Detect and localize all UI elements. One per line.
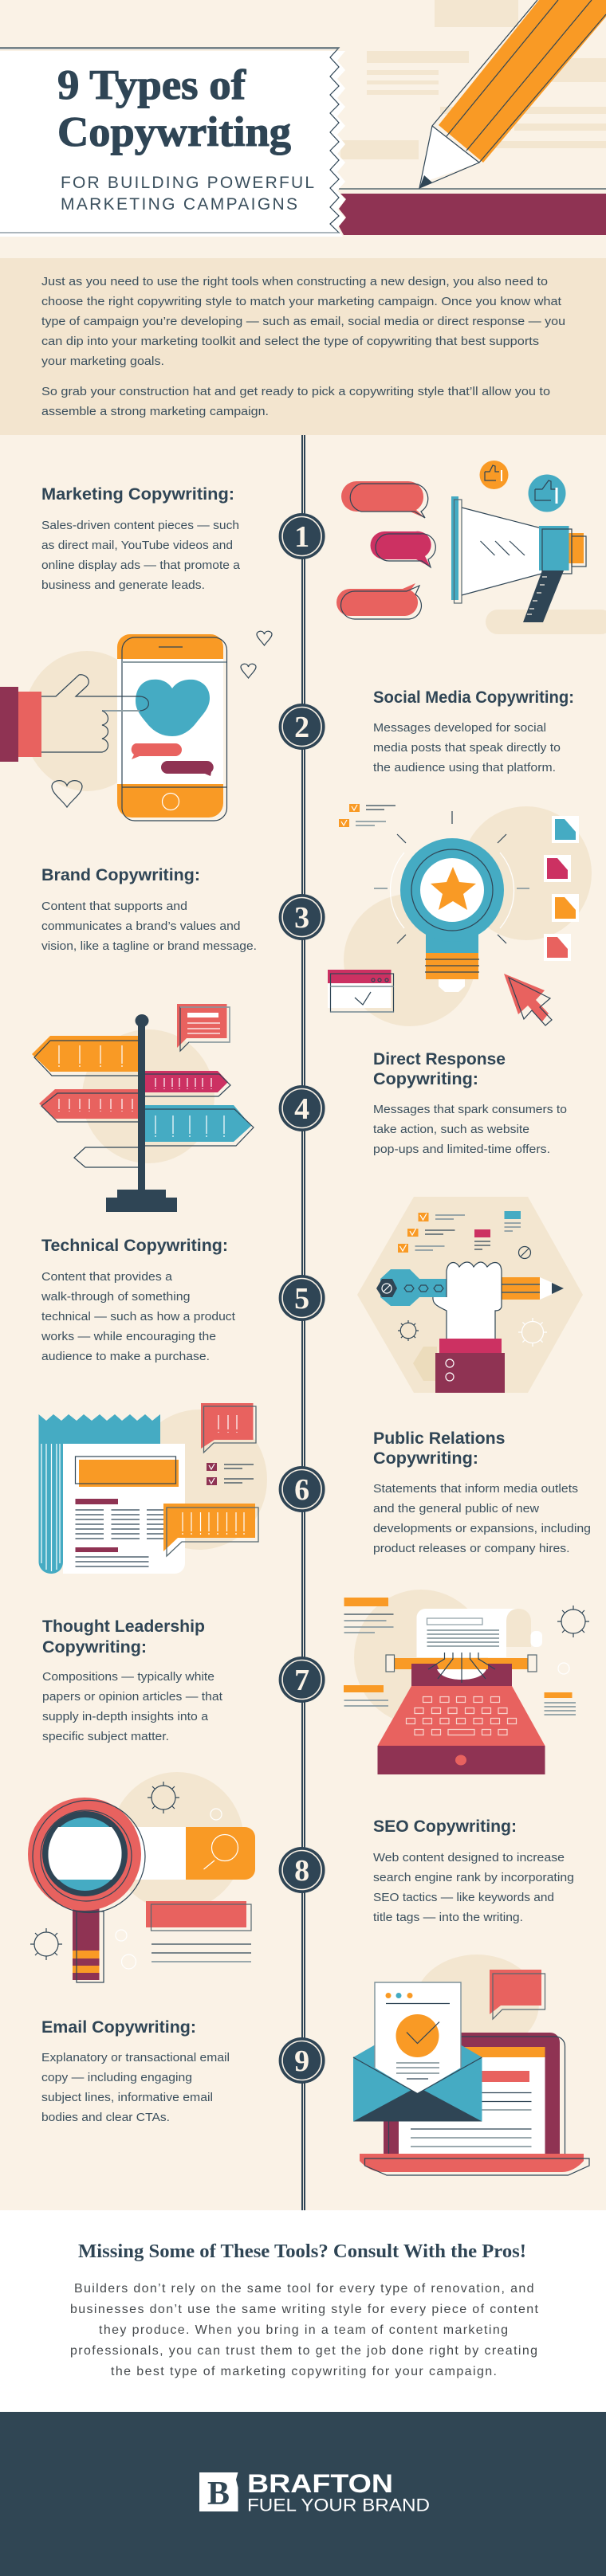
section 2 text: social media copywriting: Messages developed for social — [373, 721, 546, 735]
illustration: thumbs up hand and phone — [0, 631, 272, 821]
section 6 text: public relations copywriting: Statements that inform media outlets — [373, 1482, 578, 1496]
closing text: businesses don’t use the same writing style for every piece of content — [70, 2303, 539, 2316]
wrench — [376, 1269, 449, 1306]
section 5 text: technical copywriting: walk-through of something — [41, 1290, 190, 1304]
intro text — [41, 275, 565, 418]
logo mark: B — [207, 2476, 230, 2512]
section 8 text: seo copywriting: SEO Copywriting: — [373, 1817, 517, 1836]
blank sign — [74, 1147, 138, 1167]
checklist — [339, 804, 395, 827]
keys — [407, 1697, 517, 1735]
section 3 text: brand copywriting — [41, 866, 257, 953]
section 7 text: thought leadership copywriting: supply in-depth insights into a — [42, 1710, 209, 1723]
illustration: newspaper with speech bubbles — [38, 1403, 267, 1574]
badge 9: 9 — [294, 2045, 309, 2078]
logo wordmark: FUEL YOUR BRAND — [247, 2496, 430, 2515]
section 1 text: marketing copywriting: business and generate leads. — [41, 578, 205, 592]
coral speech bubble — [201, 1403, 256, 1453]
logo wordmark — [247, 2469, 430, 2515]
illustration: megaphone with speech bubbles — [336, 461, 606, 634]
intro text: type of campaign you’re developing — such as email, social media or direct response — you — [41, 315, 565, 328]
section 7 text: thought leadership copywriting: Copywriting: — [42, 1638, 147, 1657]
header banner: MARKETING CAMPAIGNS — [61, 195, 297, 214]
section 3 text: brand copywriting: vision, like a tagline or brand message. — [41, 939, 257, 953]
hearts — [52, 631, 272, 807]
gear light — [518, 1318, 547, 1347]
section 3 text: brand copywriting: Content that supports and — [41, 900, 187, 913]
section 8 text: seo copywriting: search engine rank by incorporating — [373, 1871, 574, 1884]
title: 9 Types of — [57, 62, 246, 108]
section 5 text: technical copywriting: Content that provides a — [41, 1270, 173, 1284]
heart — [136, 680, 210, 736]
small circle — [558, 1663, 569, 1674]
closing text — [70, 2282, 539, 2378]
section 4 text: direct response copywriting: take action, such as website — [373, 1123, 529, 1136]
section 4 text: direct response copywriting: pop-ups and limited-time offers. — [373, 1143, 550, 1156]
section 6 text: public relations copywriting: product releases or company hires. — [373, 1542, 569, 1555]
section 7 text: thought leadership copywriting: specific subject matter. — [42, 1730, 169, 1743]
illustration: typewriter — [344, 1590, 589, 1774]
badge 6: 6 — [294, 1473, 309, 1507]
checkboxes — [207, 1463, 254, 1485]
crimson sign — [145, 1071, 230, 1096]
section 1 text: marketing copywriting: Marketing Copywriting: — [41, 485, 234, 504]
orange speech bubble — [163, 1504, 258, 1556]
post — [106, 1014, 177, 1212]
section 3 text: brand copywriting: Brand Copywriting: — [41, 866, 200, 884]
coral sign — [39, 1089, 138, 1122]
laptop — [360, 2033, 589, 2175]
pencil — [502, 1277, 564, 1300]
section 6 text: public relations copywriting: Copywriting: — [373, 1449, 478, 1468]
closing heading: Missing Some of These Tools? Consult With the Pros! — [78, 2241, 526, 2262]
section 9 text: email copywriting: bodies and clear CTAs. — [41, 2111, 170, 2124]
typewriter body — [378, 1653, 545, 1774]
section 7 text: thought leadership copywriting: Thought Leadership — [42, 1617, 205, 1636]
gears — [398, 1320, 419, 1341]
badge 7: 7 — [294, 1664, 309, 1697]
intro panel — [0, 258, 606, 435]
paper — [416, 1609, 542, 1657]
logo mark — [199, 2472, 238, 2512]
badge 3 — [279, 894, 325, 940]
section 6 text: public relations copywriting: developments or expansions, including — [373, 1522, 591, 1535]
badge 4 — [279, 1085, 325, 1131]
closing text: they produce. When you bring in a team of content marketing — [99, 2323, 508, 2337]
teal sign — [145, 1105, 254, 1146]
section 9 text: email copywriting: Explanatory or transactional email — [41, 2051, 230, 2064]
intro text: your marketing goals. — [41, 355, 164, 368]
section 8 text: seo copywriting: SEO tactics — like keywords and — [373, 1891, 554, 1904]
section 1 text: marketing copywriting: online display ads — that promote a — [41, 559, 241, 572]
illustration: magnifying glass and search bar — [28, 1772, 255, 1982]
closing text: the best type of marketing copywriting for your campaign. — [111, 2365, 497, 2378]
envelope — [353, 1982, 482, 2121]
phone — [117, 634, 226, 821]
badge 3: 3 — [294, 901, 309, 935]
section 6 text: public relations copywriting: and the general public of new — [373, 1502, 539, 1515]
illustration: hand with wrench and pencil — [357, 1197, 583, 1393]
browser window — [328, 970, 394, 1012]
section 7 text: thought leadership copywriting: papers or opinion articles — that — [42, 1690, 223, 1704]
speech bubble — [177, 1004, 230, 1051]
closing panel — [0, 2210, 606, 2412]
section 8 text: seo copywriting: title tags — into the writing. — [373, 1911, 523, 1924]
closing text: professionals, you can trust them to get the job done right by creating — [70, 2344, 537, 2358]
intro text: Just as you need to use the right tools when constructing a new design, you also need to — [41, 275, 548, 288]
intro text: choose the right copywriting style to match your marketing campaign. Once you know what — [41, 295, 562, 308]
illustration: light bulb with star — [328, 804, 592, 1026]
section 1 text: marketing copywriting: Sales-driven content pieces — such — [41, 519, 239, 532]
section 6 text: public relations copywriting: Public Relations — [373, 1429, 506, 1448]
section 2 text: social media copywriting — [373, 688, 574, 774]
section 9 text: email copywriting — [41, 2018, 230, 2124]
background blocks — [340, 0, 606, 159]
footer — [0, 2412, 606, 2576]
badge 2: 2 — [294, 711, 309, 744]
section 7 text: thought leadership copywriting: Compositions — typically white — [42, 1670, 214, 1684]
section 4 text: direct response copywriting — [373, 1050, 567, 1156]
badge 9 — [279, 2037, 325, 2084]
newspaper — [38, 1414, 185, 1574]
megaphone — [451, 496, 586, 622]
subtitle: FOR BUILDING POWERFUL — [61, 174, 314, 192]
section 2 text: social media copywriting: Social Media Copywriting: — [373, 688, 574, 707]
illustration: email envelope and laptop — [353, 1955, 589, 2175]
section 5 text: technical copywriting: Technical Copywriting: — [41, 1237, 228, 1255]
section 9 text: email copywriting: Email Copywriting: — [41, 2018, 196, 2037]
section 6 text: public relations copywriting — [373, 1429, 591, 1555]
hand — [0, 675, 148, 762]
document icons — [544, 816, 579, 961]
logo wordmark: BRAFTON — [247, 2469, 393, 2498]
small circles — [116, 1809, 222, 1969]
badge 8: 8 — [294, 1854, 309, 1888]
header banner — [0, 0, 606, 237]
badge 5: 5 — [294, 1282, 309, 1315]
orange sign — [32, 1036, 138, 1076]
badge 2 — [279, 704, 325, 750]
maroon band — [339, 194, 606, 235]
thumbs up icons — [480, 461, 566, 512]
badge 4: 4 — [294, 1092, 309, 1126]
cursor arrow — [504, 974, 552, 1025]
gears — [30, 1782, 179, 1960]
section 2 text: social media copywriting: the audience using that platform. — [373, 761, 556, 774]
badge 8 — [279, 1847, 325, 1893]
section 4 text: direct response copywriting: Messages that spark consumers to — [373, 1103, 567, 1116]
badge 7 — [279, 1657, 325, 1703]
search bar — [132, 1827, 255, 1880]
ribbon — [0, 51, 345, 237]
icon: pencil — [419, 0, 606, 188]
badge 1 — [279, 513, 325, 559]
section 4 text: direct response copywriting: Copywriting: — [373, 1070, 478, 1088]
closing text: Builders don’t rely on the same tool for every type of renovation, and — [74, 2282, 534, 2296]
badge 1: 1 — [294, 520, 309, 554]
intro text: So grab your construction hat and get ready to pick a copywriting style that’ll allow you to — [41, 385, 550, 398]
illustration: signpost — [32, 1004, 254, 1212]
gear and dot — [557, 1606, 589, 1637]
notes — [344, 1598, 576, 1715]
intro text: can dip into your marketing toolkit and select the type of copywriting that best supports — [41, 335, 539, 348]
bulb — [374, 811, 529, 992]
section 8 text: seo copywriting: Web content designed to increase — [373, 1851, 565, 1864]
section 2 text: social media copywriting: media posts that speak directly to — [373, 741, 561, 755]
hand — [433, 1262, 505, 1393]
section 3 text: brand copywriting: communicates a brand’s values and — [41, 919, 241, 933]
magnifying glass — [28, 1798, 145, 1982]
section 5 text: technical copywriting: technical — such as how a product — [41, 1310, 236, 1323]
checklists — [398, 1211, 531, 1259]
section 7 text: thought leadership copywriting — [42, 1617, 223, 1743]
section 9 text: email copywriting: copy — including engaging — [41, 2071, 192, 2084]
section 5 text: technical copywriting: works — while encouraging the — [41, 1330, 216, 1343]
timeline line — [301, 435, 305, 2210]
badge 5 — [279, 1275, 325, 1321]
section 4 text: direct response copywriting: Direct Response — [373, 1050, 506, 1068]
section 5 text: technical copywriting: audience to make a purchase. — [41, 1350, 210, 1363]
coral box and lines — [146, 1901, 251, 1962]
section 5 text: technical copywriting — [41, 1237, 236, 1363]
badge 6 — [279, 1466, 325, 1512]
section 1 text: marketing copywriting — [41, 485, 241, 592]
section 1 text: marketing copywriting: as direct mail, YouTube videos and — [41, 539, 233, 552]
speech bubbles — [336, 481, 435, 619]
intro text: assemble a strong marketing campaign. — [41, 405, 269, 418]
speech bubble — [490, 1970, 545, 2019]
section 9 text: email copywriting: subject lines, informative email — [41, 2091, 213, 2104]
header banner: Copywriting — [57, 109, 291, 155]
section 8 text: seo copywriting — [373, 1817, 574, 1924]
